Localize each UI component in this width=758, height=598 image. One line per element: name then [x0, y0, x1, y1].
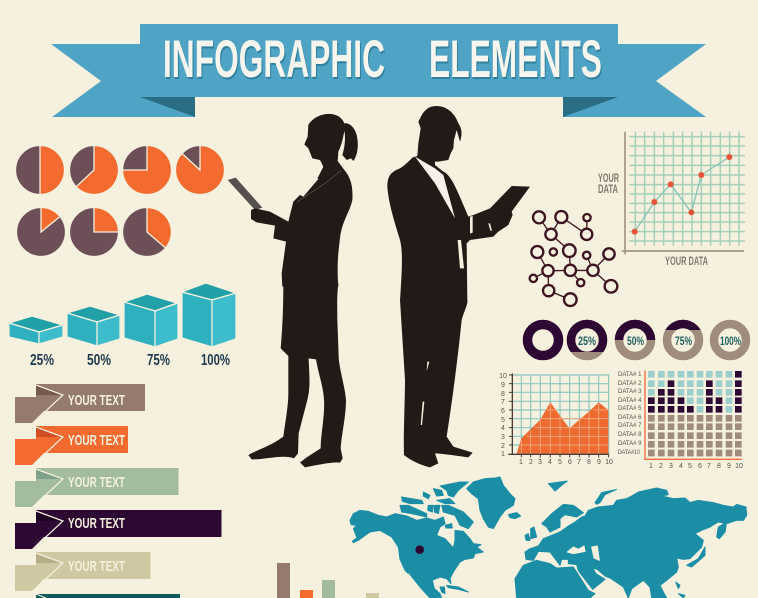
area chart — [499, 373, 613, 466]
silhouette: man — [387, 106, 530, 467]
americas and greenland — [350, 477, 521, 598]
percentage cubes — [9, 283, 236, 347]
man upper body — [387, 106, 530, 301]
matrix chart: DATA# 8 — [618, 432, 642, 438]
text ribbons — [15, 384, 222, 598]
donut charts: 75% — [675, 334, 692, 348]
area chart: 2 — [501, 443, 505, 450]
matrix chart: DATA# 1 — [618, 372, 642, 378]
matrix chart: 10 — [735, 463, 743, 470]
cube labels: 50% — [87, 352, 111, 369]
matrix chart: DATA#10 — [618, 450, 641, 456]
matrix chart: DATA# 7 — [618, 423, 642, 429]
matrix chart: 3 — [669, 463, 673, 470]
matrix chart: DATA# 5 — [618, 406, 642, 412]
ribbon 4: YOUR TEXT — [68, 515, 125, 532]
area chart: 6 — [568, 459, 572, 466]
area chart: 7 — [501, 399, 505, 406]
matrix chart: DATA# 6 — [618, 415, 642, 421]
ribbon 2: YOUR TEXT — [68, 432, 125, 449]
bar chart — [277, 563, 379, 598]
matrix chart: DATA# 4 — [618, 398, 642, 404]
matrix chart: 7 — [707, 463, 711, 470]
line chart — [598, 132, 745, 268]
matrix chart: 9 — [727, 463, 731, 470]
area chart: 8 — [501, 391, 505, 398]
area chart: 7 — [577, 459, 581, 466]
ribbon 6 — [36, 594, 180, 598]
area chart: 9 — [597, 459, 601, 466]
location marker — [415, 545, 424, 554]
woman upper body — [228, 114, 358, 287]
ribbon 5 — [15, 552, 150, 591]
matrix chart: DATA# 2 — [618, 381, 642, 387]
axis labels: DATA — [598, 182, 618, 196]
axis labels: YOUR — [598, 171, 619, 185]
matrix chart — [618, 371, 743, 470]
cube labels: 75% — [147, 352, 170, 369]
eurasia and africa — [515, 481, 747, 598]
area chart: 4 — [501, 425, 505, 432]
donut charts: 100% — [720, 334, 741, 348]
donut charts: 50% — [627, 334, 644, 348]
ribbon 3: YOUR TEXT — [68, 474, 125, 491]
ribbon 5: YOUR TEXT — [68, 558, 125, 575]
donut charts: 25% — [578, 334, 596, 348]
area chart: 8 — [587, 459, 591, 466]
ribbon 4 — [15, 510, 222, 549]
pie charts — [16, 145, 224, 256]
banner ribbon — [51, 24, 706, 117]
matrix chart: 2 — [659, 463, 663, 470]
matrix chart: 5 — [688, 463, 692, 470]
area chart: 10 — [499, 373, 507, 380]
area chart: 1 — [501, 451, 505, 458]
network diagram — [530, 211, 617, 306]
axis labels: YOUR DATA — [665, 254, 708, 268]
matrix chart: DATA# 3 — [618, 389, 642, 395]
area chart: 6 — [501, 408, 505, 415]
area chart: 4 — [548, 459, 552, 466]
area chart: 5 — [501, 417, 505, 424]
matrix chart: 4 — [679, 463, 683, 470]
woman lower body — [248, 283, 346, 467]
title: ELEMENTS — [429, 30, 602, 89]
ribbon 2 — [15, 426, 128, 465]
ribbon 1 — [15, 384, 145, 423]
world map — [350, 477, 747, 598]
donut charts — [528, 324, 746, 356]
area chart: 2 — [529, 459, 533, 466]
area chart: 3 — [501, 434, 505, 441]
cube labels: 25% — [30, 352, 54, 369]
matrix chart: DATA# 9 — [618, 441, 642, 447]
axis labels — [598, 171, 708, 268]
area chart: 10 — [605, 459, 613, 466]
area chart: 1 — [519, 459, 523, 466]
ribbon 3 — [15, 468, 178, 507]
area chart: 5 — [558, 459, 562, 466]
matrix chart: 6 — [698, 463, 702, 470]
ribbon 1: YOUR TEXT — [68, 392, 125, 409]
area chart: 9 — [501, 382, 505, 389]
title: INFOGRAPHIC — [163, 30, 385, 89]
silhouette: woman — [228, 114, 358, 467]
matrix chart: 1 — [649, 463, 653, 470]
title: ELEMENTS — [430, 32, 603, 91]
area chart: 3 — [538, 459, 542, 466]
cube labels: 100% — [201, 352, 230, 369]
man lower body — [400, 300, 473, 467]
cube labels — [30, 352, 230, 369]
matrix chart: 8 — [717, 463, 721, 470]
title: INFOGRAPHIC — [164, 32, 386, 91]
